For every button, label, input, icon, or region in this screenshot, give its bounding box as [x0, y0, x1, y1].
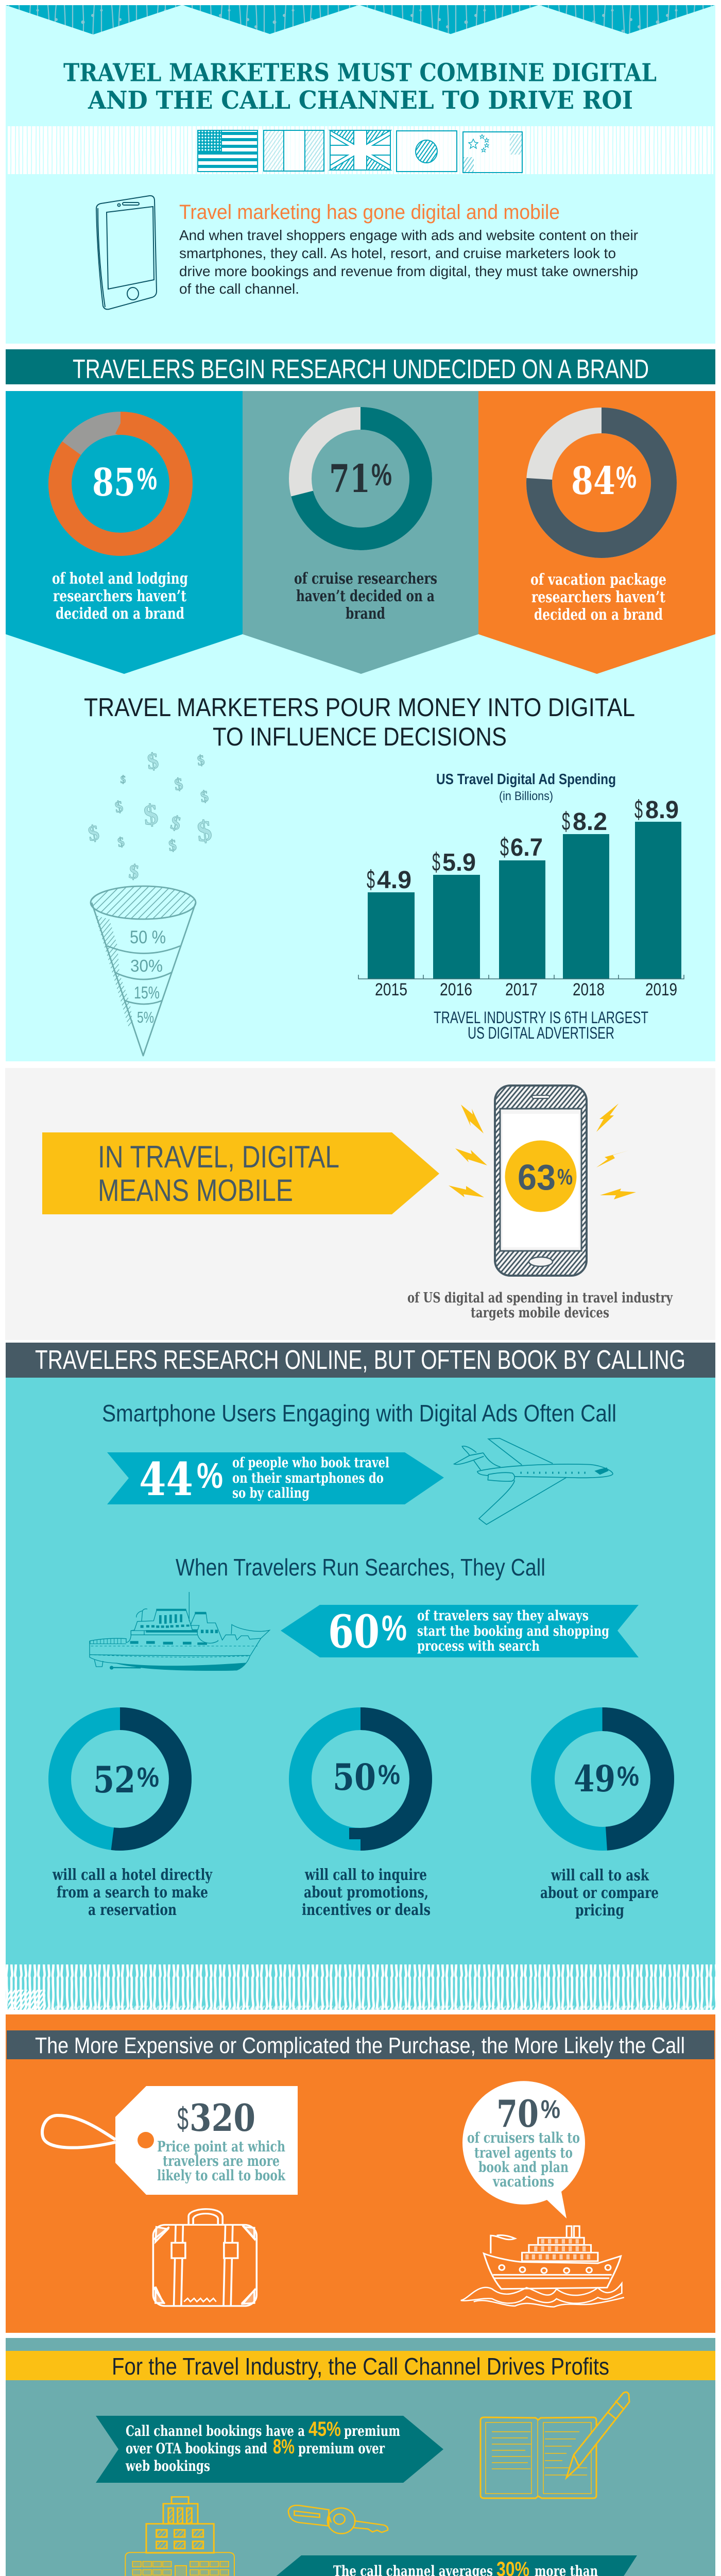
- donut: 49%: %: [617, 1761, 639, 1792]
- bar values: 8.9: [645, 796, 679, 824]
- panel: digital means mobile: [5, 1068, 715, 1340]
- donut: 84%: %: [616, 460, 637, 495]
- ribbon: 44%: %: [197, 1455, 223, 1496]
- price tag: $320: Price point at which: [157, 2138, 285, 2155]
- icon: lightning bolts: [449, 1104, 636, 1199]
- light background: pour money section: [6, 631, 715, 1061]
- heading: pour money: TRAVEL MARKETERS POUR MONEY INTO DIGITAL: [84, 693, 635, 722]
- bar values: 5.9: [442, 849, 476, 876]
- heading: travel marketing: Travel marketing has gone digital and mobile: [179, 201, 560, 224]
- ribbon: 60%: process with search: [417, 1638, 540, 1654]
- icon: phone with 63%: 63: [518, 1157, 556, 1197]
- donut: 85%: %: [137, 462, 157, 496]
- donut: 85%: 85: [92, 461, 135, 505]
- icon: airplane: [454, 1438, 613, 1524]
- caption: [52, 570, 188, 623]
- caption: 63%: targets mobile devices: [471, 1305, 609, 1321]
- icon: suitcase: [153, 2209, 256, 2306]
- panel: hotel 85%: [6, 391, 243, 674]
- chart note: TRAVEL INDUSTRY IS 6TH LARGEST: [434, 1008, 648, 1027]
- ribbon: 45% premium: 45%: [308, 2418, 341, 2441]
- ribbon: 45% premium: web bookings: [125, 2458, 210, 2475]
- icon: falling dollars: $: [87, 821, 101, 846]
- caption: haven’t decided on a: [296, 587, 435, 605]
- caption: decided on a brand: [56, 605, 184, 623]
- icon: falling dollars: $: [199, 787, 210, 806]
- captions: donuts: about or compare: [540, 1884, 659, 1902]
- captions: donuts: will call to inquire: [304, 1866, 427, 1884]
- year labels: 2018: [573, 980, 605, 999]
- price tag: $320: $: [177, 2102, 188, 2137]
- icon: falling dollars: $: [116, 834, 126, 850]
- bar values: 8.2: [573, 808, 607, 836]
- ribbon: 45% premium: premium over: [298, 2440, 385, 2457]
- panel: call channel drives profits: [6, 2338, 715, 2576]
- captions: donuts: incentives or deals: [302, 1901, 431, 1919]
- icon: cruise ship: [461, 2226, 624, 2307]
- year labels: 2015: [375, 980, 407, 999]
- chart title: [436, 771, 616, 803]
- icons: world flags: [198, 130, 522, 173]
- caption: researchers haven’t: [531, 588, 665, 606]
- icon: falling dollars: $: [195, 815, 213, 848]
- panel: vacation 84%: [478, 391, 715, 674]
- caption: decided on a brand: [534, 606, 663, 624]
- bar values: $: [562, 807, 570, 836]
- caption: [530, 571, 666, 624]
- title: [63, 59, 657, 115]
- heading: pour money: TO INFLUENCE DECISIONS: [213, 722, 507, 751]
- captions: donuts: [52, 1866, 659, 1920]
- donut: 50%: %: [378, 1759, 400, 1790]
- bar values: 4.9: [377, 867, 411, 894]
- intro paragraph: smartphones, they call. As hotel, resort, and cruise marketers look to: [179, 245, 616, 261]
- donut: 50%: [300, 1719, 421, 1839]
- icon: marketing funnel: 5%: [137, 1008, 154, 1026]
- captions: donuts: pricing: [575, 1902, 624, 1920]
- flag: China: [463, 132, 522, 173]
- flag: Italy: [264, 130, 324, 171]
- ribbon: 60%: %: [382, 1608, 407, 1648]
- ribbon: 44%: so by calling: [232, 1485, 310, 1501]
- caption: of cruise researchers: [294, 570, 437, 588]
- price tag: $320: 320: [190, 2096, 255, 2140]
- donut: 84%: [539, 420, 664, 545]
- icon: marketing funnel: 15%: [134, 983, 160, 1002]
- icon: falling dollars: $: [128, 860, 140, 884]
- icon: falling dollars: $: [121, 773, 126, 786]
- price tag: $320: [42, 2086, 298, 2195]
- chart title: US Travel Digital Ad Spending: [436, 771, 616, 788]
- donut: 49%: 49: [574, 1757, 615, 1800]
- donut: 52%: [60, 1719, 180, 1839]
- donut: 84%: 84: [571, 459, 615, 503]
- icon: falling dollars: $: [113, 797, 125, 816]
- ribbon: 60%: of travelers say they always: [417, 1608, 589, 1624]
- intro paragraph: And when travel shoppers engage with ads and website content on their: [179, 227, 638, 243]
- donut: 71%: [300, 418, 421, 539]
- arrow: in travel digital means mobile: [42, 1132, 439, 1214]
- ribbon: 44%: [107, 1452, 444, 1506]
- heading: smartphone users: Smartphone Users Engaging with Digital Ads Often Call: [102, 1400, 616, 1427]
- flag: UK: [330, 130, 390, 170]
- speech bubble: 70%: of cruisers talk to: [467, 2129, 580, 2146]
- caption: researchers haven’t: [53, 587, 186, 605]
- panel: more expensive purchase: [6, 2014, 715, 2333]
- captions: donuts: about promotions,: [304, 1884, 428, 1902]
- title: TRAVEL MARKETERS MUST COMBINE DIGITAL: [63, 59, 657, 88]
- donut: 50%: 50: [333, 1756, 376, 1799]
- speech bubble: 70%: %: [541, 2095, 560, 2124]
- ribbon: 44%: 44: [139, 1452, 193, 1506]
- bar values: $: [634, 795, 643, 824]
- icon: falling dollars: $: [196, 752, 205, 769]
- speech bubble: 70%: [462, 2081, 585, 2218]
- panel: research online: [6, 1343, 715, 2010]
- chart title: (in Billions): [499, 789, 553, 803]
- icon: ship: [90, 1592, 269, 1671]
- ribbon: 45% premium: Call channel bookings have a: [126, 2422, 305, 2439]
- ribbon: 30% more: [261, 2555, 637, 2576]
- donut: 49%: [543, 1719, 662, 1839]
- caption: [294, 570, 437, 623]
- bar values: $: [500, 833, 509, 861]
- ribbon: 60%: start the booking and shopping: [417, 1623, 609, 1639]
- year labels: 2016: [440, 980, 472, 999]
- caption: 63%: [407, 1290, 673, 1321]
- icon: falling dollars: $: [168, 811, 183, 835]
- price tag: $320: travelers are more: [163, 2153, 280, 2170]
- price tag: $320: likely to call to book: [157, 2167, 285, 2184]
- intro paragraph: of the call channel.: [179, 281, 299, 297]
- panel: intro: [6, 5, 715, 344]
- captions: donuts: will call a hotel directly: [52, 1866, 213, 1884]
- icon: key: [288, 2505, 388, 2534]
- flag: Japan: [397, 131, 457, 172]
- year labels: 2019: [645, 980, 677, 999]
- icon: marketing funnel: 50 %: [130, 927, 166, 947]
- icon: falling dollars: $: [173, 775, 184, 794]
- ribbon: 44%: of people who book travel: [232, 1455, 389, 1471]
- captions: donuts: will call to ask: [551, 1867, 649, 1885]
- ribbon: 45% premium: premium: [344, 2422, 400, 2439]
- donut: 71%: 71: [329, 457, 370, 501]
- top zigzag pattern: [6, 5, 715, 35]
- bar values: $: [367, 865, 375, 894]
- bars: [368, 822, 681, 979]
- bar values: 6.7: [510, 834, 543, 861]
- icon: falling dollars: $: [142, 799, 160, 832]
- stripe band: [6, 1964, 715, 2010]
- ribbon: 44%: on their smartphones do: [232, 1470, 384, 1486]
- ribbon: 45% premium: over OTA bookings and: [126, 2440, 267, 2457]
- chart note: US DIGITAL ADVERTISER: [468, 1024, 614, 1042]
- title: AND THE CALL CHANNEL TO DRIVE ROI: [88, 86, 633, 115]
- speech bubble: 70%: vacations: [492, 2173, 554, 2190]
- icon: falling dollars: $: [167, 836, 177, 855]
- bar values: $: [432, 848, 440, 876]
- captions: donuts: a reservation: [88, 1901, 177, 1919]
- ribbon: 60%: [281, 1605, 639, 1658]
- speech bubble: 70%: travel agents to: [474, 2144, 573, 2161]
- donut: 52%: %: [137, 1762, 159, 1793]
- year labels: [375, 980, 677, 999]
- caption: brand: [346, 605, 385, 623]
- caption: of vacation package: [530, 571, 666, 589]
- icon: hotel: [125, 2497, 234, 2576]
- icon: marketing funnel: 30%: [130, 956, 163, 975]
- arrow: in travel digital means mobile: IN TRAVEL, DIGITAL: [98, 1140, 339, 1174]
- ribbon: 45% premium: 8%: [273, 2435, 295, 2458]
- heading: pour money: [84, 693, 635, 751]
- speech bubble: 70%: book and plan: [478, 2159, 569, 2176]
- arrow: in travel digital means mobile: MEANS MOBILE: [98, 1173, 293, 1208]
- bar values: [367, 795, 679, 894]
- icon: falling dollars: [87, 748, 213, 884]
- caption: of hotel and lodging: [52, 570, 188, 588]
- captions: donuts: from a search to make: [57, 1884, 208, 1902]
- donut: 85%: [60, 423, 181, 544]
- icon: phone with 63%: [495, 1086, 587, 1276]
- donut: 71%: %: [371, 457, 392, 492]
- icon: marketing funnel: [91, 886, 196, 1056]
- flag: USA: [198, 130, 258, 172]
- icon: falling dollars: $: [146, 748, 160, 774]
- chart: US travel digital ad spending: [358, 771, 684, 1042]
- icon: notebook and pen: [480, 2392, 629, 2498]
- icon: smartphone sketch: [96, 196, 157, 309]
- year labels: 2017: [505, 980, 538, 999]
- intro paragraph: [179, 227, 638, 297]
- icon: phone with 63%: %: [557, 1164, 573, 1190]
- speech bubble: 70%: 70: [496, 2092, 539, 2136]
- ribbon: 45% premium: [96, 2416, 443, 2483]
- panel: cruise 71%: [243, 391, 478, 674]
- chart note: [434, 1008, 648, 1042]
- ribbon: 60%: 60: [328, 1605, 380, 1658]
- flag texture band: [8, 126, 713, 174]
- intro paragraph: drive more bookings and revenue from digital, they must take ownership: [179, 263, 638, 279]
- heading: when travelers run searches: When Travelers Run Searches, They Call: [176, 1554, 545, 1581]
- banner: call channel drives profits: For the Travel Industry, the Call Channel Drives Profits: [112, 2353, 609, 2380]
- donut: 52%: 52: [93, 1758, 135, 1801]
